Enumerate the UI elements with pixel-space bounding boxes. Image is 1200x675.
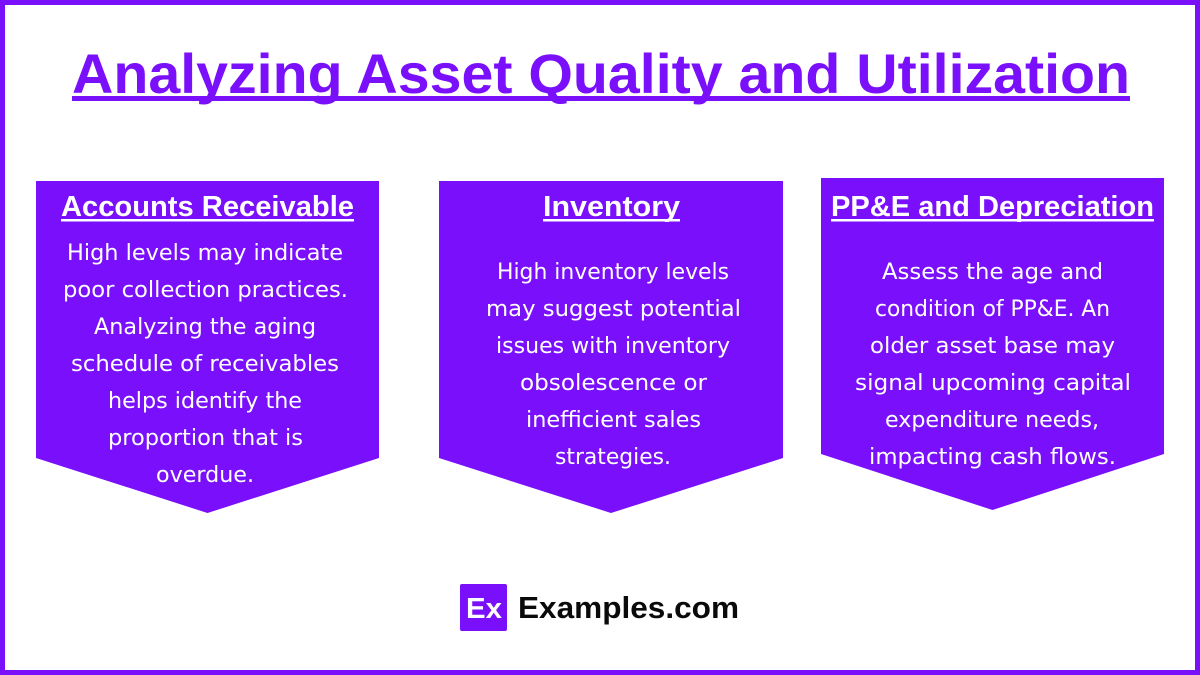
text block: accounts receivable: overdue. [156, 463, 254, 488]
panel: accounts receivable [36, 181, 379, 513]
text block: inventory: strategies. [555, 445, 671, 470]
text block: PP&E and depreciation: impacting cash flows. [869, 445, 1116, 470]
text block: inventory: High inventory levels [497, 260, 729, 285]
icon: Ex badge: Ex [466, 593, 502, 625]
text block: inventory: may suggest potential [486, 297, 741, 322]
text block: accounts receivable: proportion that is [108, 426, 303, 451]
heading: PP&E and depreciation: PP&E and Depreciation [831, 191, 1154, 223]
text block: PP&E and depreciation: Assess the age and [882, 260, 1103, 285]
logo: Examples.com [460, 584, 739, 631]
heading: inventory: Inventory [543, 191, 680, 223]
heading: accounts receivable: Accounts Receivable [61, 191, 354, 223]
text block: inventory: issues with inventory [496, 334, 730, 359]
text block: accounts receivable: Analyzing the aging [94, 315, 316, 340]
title: Analyzing Asset Quality and Utilization [72, 42, 1130, 105]
text block: accounts receivable: schedule of receivables [71, 352, 339, 377]
text block: accounts receivable: helps identify the [108, 389, 302, 414]
panel: PP&E and depreciation [821, 178, 1164, 510]
text block: PP&E and depreciation: condition of PP&E. An [875, 297, 1110, 322]
text block: inventory: obsolescence or [520, 371, 708, 396]
wordmark: Examples.com [518, 590, 739, 625]
icon: Ex badge [460, 584, 507, 631]
text block: inventory: inefficient sales [526, 408, 701, 433]
panel: inventory [439, 181, 783, 513]
text block: accounts receivable: High levels may indicate [67, 241, 343, 266]
text block: accounts receivable: poor collection practices. [63, 278, 348, 303]
text block: PP&E and depreciation: older asset base may [870, 334, 1115, 359]
text block: PP&E and depreciation: expenditure needs, [885, 408, 1099, 433]
text block: PP&E and depreciation: signal upcoming capital [855, 371, 1131, 396]
